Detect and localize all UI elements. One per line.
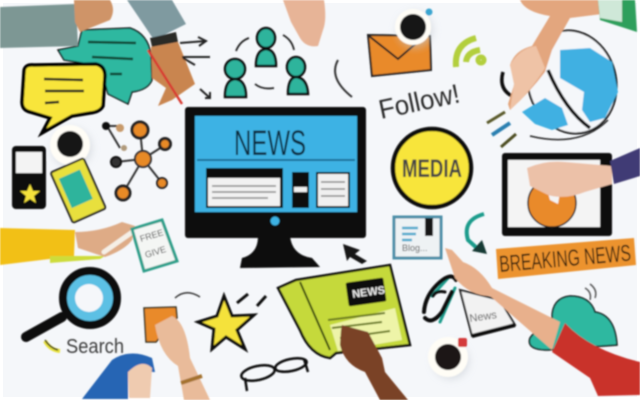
blog card: Blog... [402, 243, 428, 253]
glasses [240, 356, 308, 391]
hand: top middle [283, 0, 325, 46]
bare arm [128, 364, 152, 398]
curved teal arrow [467, 214, 487, 254]
monitor stand [240, 236, 320, 268]
handwriting under sleeve [50, 256, 105, 263]
star icon [198, 294, 266, 349]
speech bubble: teal [58, 28, 152, 104]
arc arrow [175, 293, 200, 298]
free note [132, 220, 177, 271]
cursor arrow [343, 244, 367, 264]
dashes near finger [487, 112, 516, 147]
sleeve: plaid [610, 148, 640, 184]
media badge [393, 129, 471, 207]
arrows near hand [180, 37, 210, 98]
red sleeve [552, 323, 640, 396]
newspaper: NEWS [351, 284, 386, 301]
free note: GIVE [144, 244, 167, 260]
monitor sidebar [292, 172, 350, 208]
watch [150, 32, 178, 47]
arm and pointing hand: top right [508, 0, 602, 110]
notebook icon [51, 158, 106, 223]
sleeve: top right [598, 0, 637, 32]
hand: on orange square [155, 316, 210, 400]
wifi icon [456, 38, 484, 67]
bracelet [181, 376, 202, 383]
media badge: MEDIA [402, 155, 462, 183]
pointing arm [445, 248, 560, 350]
envelope icon [368, 35, 431, 76]
phone icon [12, 146, 46, 209]
curved arrow [335, 60, 352, 97]
cloud icon [529, 284, 617, 350]
tablet [502, 153, 612, 236]
dark hand on newspaper [340, 325, 408, 400]
magnifier icon [26, 271, 117, 337]
orange square icon [144, 307, 177, 342]
people network icon [225, 28, 308, 97]
newspaper [278, 265, 410, 358]
coffee cup: bottom [428, 337, 469, 379]
monitor article panel [206, 168, 283, 208]
blue sleeve [82, 353, 155, 399]
globe [502, 20, 628, 144]
hand: holding pen [151, 42, 195, 106]
hand: holding marker [75, 222, 135, 257]
search label: Search [66, 336, 124, 358]
sleeve: top centre [127, 0, 186, 40]
chain link icon [424, 276, 456, 322]
hand: top left [74, 0, 113, 32]
coffee cup: top [395, 8, 433, 48]
red pen [148, 50, 182, 104]
sleeve: top left [0, 4, 78, 48]
coffee cup: left [50, 125, 92, 168]
search label [45, 336, 124, 358]
network diagram [102, 122, 170, 200]
free note: FREE [139, 227, 165, 244]
paper note: News [469, 309, 498, 325]
speech bubble: yellow [22, 64, 105, 133]
paper note [460, 290, 515, 336]
monitor screen [195, 116, 357, 212]
monitor [185, 107, 366, 268]
monitor headline: NEWS [234, 124, 306, 163]
monitor frame [185, 107, 366, 238]
hand on tablet [527, 162, 612, 197]
blog card [394, 217, 441, 258]
white marker [104, 228, 138, 252]
sleeve: yellow [0, 228, 75, 265]
follow text: Follow! [376, 78, 462, 125]
